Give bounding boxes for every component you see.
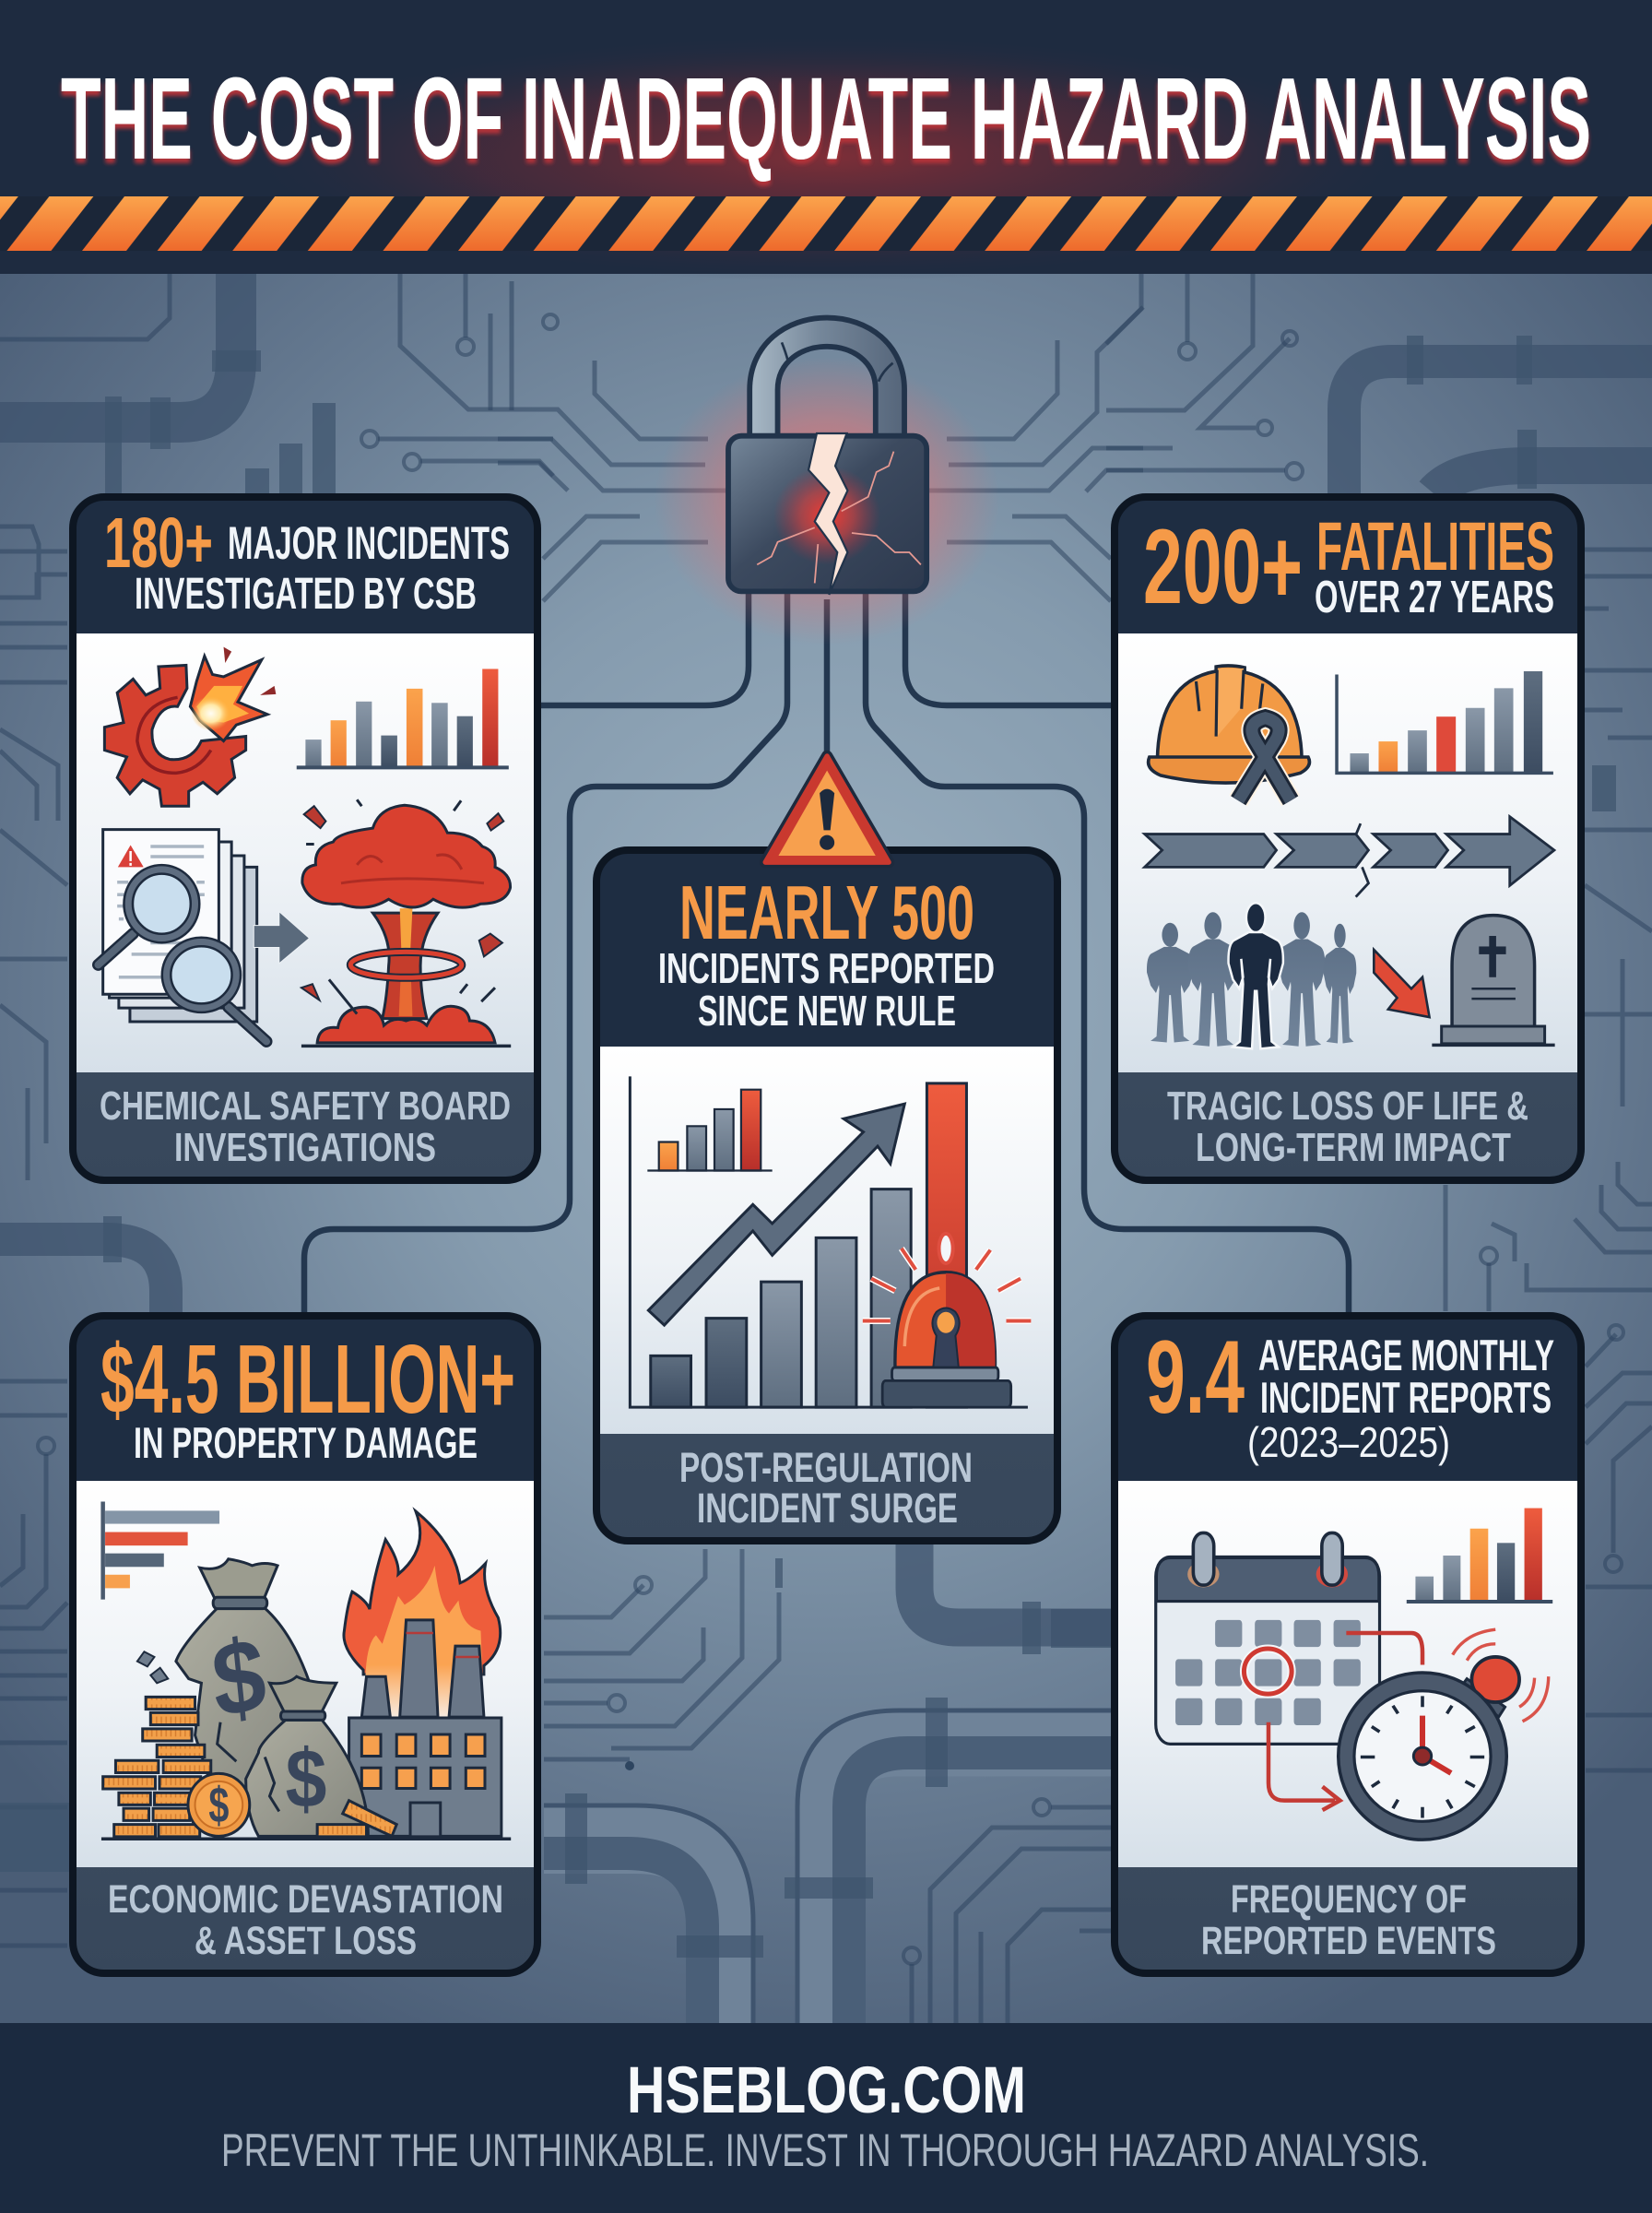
icon: burning factory	[344, 1511, 502, 1837]
icon: small money bag: $	[286, 1733, 326, 1825]
workers silhouettes	[1147, 903, 1356, 1048]
stat label line 2: SINCE NEW RULE	[698, 987, 956, 1035]
header band	[0, 0, 1652, 281]
small bar chart	[647, 1090, 773, 1171]
caption: CHEMICAL SAFETY BOARD	[100, 1083, 511, 1129]
stat label line 3: (2023–2025)	[1247, 1418, 1450, 1466]
caption: FREQUENCY OF	[1231, 1877, 1467, 1922]
panel: nearly 500	[596, 756, 1057, 1541]
red arrow	[1374, 950, 1430, 1017]
icon: calendar	[1156, 1533, 1422, 1810]
icon: alarm beacon	[863, 1234, 1031, 1407]
panel border	[1115, 1316, 1581, 1973]
caption line 2: & ASSET LOSS	[195, 1919, 417, 1963]
icon: large money bag: $	[207, 1615, 271, 1741]
stat number: NEARLY 500	[679, 870, 974, 955]
footer band	[0, 2023, 1652, 2213]
icon: small money bag	[218, 1676, 368, 1836]
bar chart	[1407, 1509, 1552, 1602]
illustration: gear, chart, documents, mushroom cloud	[98, 647, 511, 1046]
illustration: helmet, chart, timeline, workers, gravestone	[1145, 666, 1555, 1048]
panel image area	[1117, 633, 1578, 1072]
panel border	[73, 1316, 537, 1973]
bar chart	[1337, 671, 1553, 773]
connector wires	[304, 590, 1349, 1314]
illustration: money bags, coins, burning factory	[101, 1501, 511, 1839]
illustration: calendar, chart, stopwatch	[1156, 1509, 1552, 1840]
panel image area	[76, 1481, 537, 1867]
caption: ECONOMIC DEVASTATION	[108, 1877, 503, 1922]
icon: coin stacks	[103, 1697, 396, 1837]
background pipes and circuits	[0, 274, 1652, 2023]
panel image area	[599, 1047, 1055, 1434]
icon: documents and magnifiers	[98, 830, 266, 1041]
stat label: IN PROPERTY DAMAGE	[134, 1418, 478, 1467]
footer brand: HSEBLOG.COM	[627, 2054, 1026, 2127]
stat number: 9.4	[1146, 1320, 1245, 1435]
panel border	[1115, 497, 1581, 1180]
trend arrow	[648, 1104, 904, 1325]
caption: POST-REGULATION	[679, 1444, 973, 1491]
caption line 2: LONG-TERM IMPACT	[1196, 1125, 1511, 1170]
stat number: 180+	[104, 503, 213, 583]
large bar chart	[630, 1076, 1028, 1407]
caption line 2: INCIDENT SURGE	[697, 1485, 958, 1532]
caption: TRAGIC LOSS OF LIFE &	[1167, 1083, 1528, 1129]
icon: hard hat with ribbon	[1149, 666, 1309, 800]
stat label line 2: INVESTIGATED BY CSB	[135, 570, 477, 619]
stat number: $4.5 BILLION+	[100, 1325, 515, 1434]
coin dollar sign: $	[208, 1778, 229, 1834]
panel border	[596, 850, 1057, 1541]
timeline arrows	[1145, 817, 1554, 897]
icon: mushroom cloud	[301, 799, 511, 1046]
stat label: INCIDENTS REPORTED	[658, 944, 995, 992]
panel: $4.5 billion+	[73, 1316, 537, 1973]
panel image area	[76, 633, 537, 1072]
panel: 200+ fatalities	[1115, 497, 1581, 1180]
icon: broken padlock	[655, 318, 1000, 645]
icon: stopwatch	[1339, 1629, 1549, 1840]
caption line 2: INVESTIGATIONS	[174, 1125, 436, 1170]
stat label: MAJOR INCIDENTS	[228, 517, 510, 569]
panel: 180+ major incidents	[73, 497, 537, 1180]
horizontal bar chart	[103, 1501, 219, 1600]
caption line 2: REPORTED EVENTS	[1201, 1919, 1496, 1963]
icon: large money bag	[137, 1559, 319, 1801]
arrow	[254, 912, 310, 964]
bar chart	[297, 669, 509, 767]
stat number: 200+	[1143, 508, 1303, 626]
icon: warning triangle	[765, 756, 889, 862]
panel image area	[1117, 1481, 1578, 1867]
icon: gravestone	[1432, 916, 1555, 1045]
hazard stripe	[0, 196, 1652, 251]
icon: broken gear	[104, 647, 276, 806]
panel: 9.4 monthly reports	[1115, 1316, 1581, 1973]
illustration: surge chart and alarm	[630, 1076, 1031, 1407]
panel border	[73, 497, 537, 1180]
